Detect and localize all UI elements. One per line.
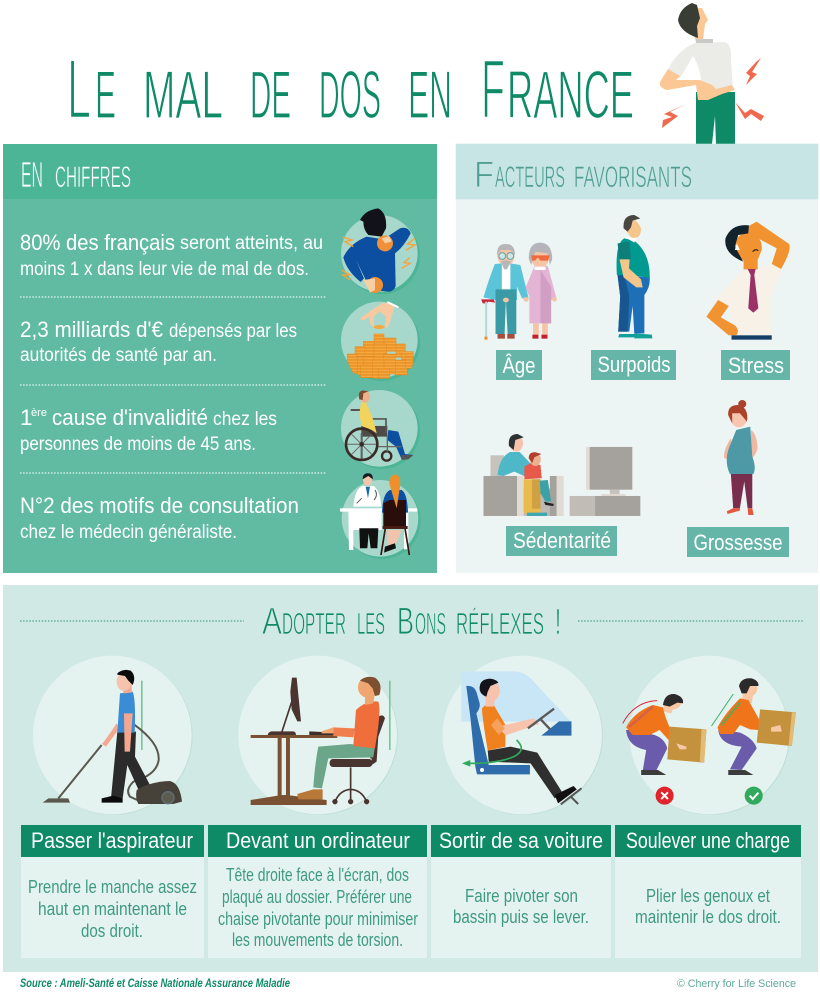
card: passer l'aspirateur: dos droit. (81, 920, 143, 941)
heading: en chiffres: EN (21, 154, 43, 195)
illustration: getting out of the car (442, 656, 603, 815)
card: devant un ordinateur: plaqué au dossier. Préférer une (222, 886, 412, 907)
card: sortir de sa voiture: bassin puis se lever. (453, 906, 589, 927)
title: MAL (143, 57, 223, 133)
panel: facteurs favorisants (456, 144, 818, 573)
heading: adopter les bons reflexes: DOPTER (282, 606, 346, 641)
label: age: Âge (502, 353, 536, 378)
heading: facteurs favorisants (456, 144, 818, 199)
card: devant un ordinateur: les mouvements de torsion. (232, 929, 403, 950)
icon: person on couch watching TV (483, 434, 640, 516)
heading: adopter les bons reflexes: LES (357, 606, 385, 641)
icon: back and neck pain (341, 208, 420, 294)
label: surpoids: Surpoids (598, 352, 670, 377)
icon: overweight man (617, 215, 652, 338)
heading: adopter les bons reflexes: RÉFLEXES (456, 606, 544, 641)
heading: facteurs favorisants: FAVORISANTS (574, 161, 692, 194)
source: Source : Ameli-Santé et Caisse Nationale Assurance Maladie (20, 976, 290, 990)
stat: 1ere cause: personnes de moins de 45 ans. (20, 434, 256, 455)
icon: coins (341, 302, 420, 381)
title: RANCE (507, 57, 634, 133)
icon: pregnant woman (724, 400, 758, 515)
card: sortir de sa voiture (431, 825, 611, 958)
stat: 1ere cause: chez les (213, 409, 277, 430)
panel: en chiffres (3, 144, 437, 573)
stat: n°2: chez le médecin généraliste. (20, 522, 237, 543)
heading: adopter les bons reflexes (262, 601, 561, 643)
title: EN (408, 57, 452, 133)
stat: 2,3 milliards: 2,3 milliards d'€ (20, 317, 163, 342)
illustration: vacuum (33, 656, 193, 815)
card: sortir de sa voiture: Sortir de sa voiture (439, 828, 603, 853)
heading: adopter les bons reflexes: B (397, 601, 414, 643)
heading: en chiffres: CHIFFRES (55, 161, 131, 194)
title: DE (250, 57, 291, 133)
stat: n°2: N°2 des motifs de consultation (20, 493, 299, 518)
card: soulever une charge (615, 825, 801, 958)
stat: 1ere cause: 1 (20, 405, 33, 430)
icon: wheelchair (341, 390, 420, 469)
card: soulever une charge: Plier les genoux et (646, 885, 770, 906)
label: grossesse: Grossesse (694, 530, 782, 555)
card: devant un ordinateur: Tête droite face à l'écran, dos (226, 864, 409, 885)
stat: 80%: 80% des français (20, 230, 175, 255)
stat: 80%: seront atteints, au (180, 233, 323, 254)
card: soulever une charge: maintenir le dos droit. (635, 906, 781, 927)
card: devant un ordinateur: chaise pivotante pour minimiser (218, 908, 418, 929)
title: DOS (319, 57, 381, 133)
stat: 2,3 milliards: autorités de santé par an. (20, 345, 217, 366)
label: stress: Stress (728, 353, 784, 378)
heading: facteurs favorisants: ACTEURS (495, 161, 565, 194)
heading: adopter les bons reflexes: ONS (415, 606, 446, 641)
title (67, 42, 634, 136)
stat: 2,3 milliards: dépensés par les (169, 321, 297, 342)
card: passer l'aspirateur: Passer l'aspirateur (31, 828, 193, 853)
stat: n°2 (20, 493, 299, 543)
icon: man with back pain (660, 3, 764, 144)
stat: 2,3 milliards (20, 317, 297, 366)
icon: stressed man (706, 222, 790, 340)
stat: 80%: moins 1 x dans leur vie de mal de dos. (20, 259, 309, 280)
icon: elderly couple (481, 243, 557, 340)
card: passer l'aspirateur: Prendre le manche assez (28, 876, 197, 897)
heading: adopter les bons reflexes: A (262, 601, 283, 643)
illustration: lifting a load (623, 656, 796, 815)
panel: adopter les bons reflexes (3, 585, 818, 972)
card: devant un ordinateur (208, 825, 427, 958)
title: L (67, 42, 91, 136)
card: passer l'aspirateur (21, 825, 204, 958)
card: devant un ordinateur: Devant un ordinateur (226, 828, 410, 853)
heading: en chiffres (3, 144, 437, 199)
stat: 1ere cause (20, 405, 277, 455)
stat: 80% (20, 230, 323, 280)
heading: facteurs favorisants: F (474, 154, 494, 195)
illustration: at the computer (238, 656, 398, 815)
card: sortir de sa voiture: Faire pivoter son (465, 885, 578, 906)
label: sedentarite: Sédentarité (513, 528, 611, 553)
stat: 1ere cause: ère (31, 407, 47, 419)
heading: adopter les bons reflexes: ! (555, 601, 561, 642)
title: E (95, 57, 116, 133)
credit: © Cherry for Life Science (677, 978, 796, 990)
icon: doctor consultation (340, 473, 421, 559)
stat: 1ere cause: cause d'invalidité (52, 405, 208, 430)
title: F (481, 42, 505, 136)
card: passer l'aspirateur: haut en maintenant le (38, 898, 187, 919)
